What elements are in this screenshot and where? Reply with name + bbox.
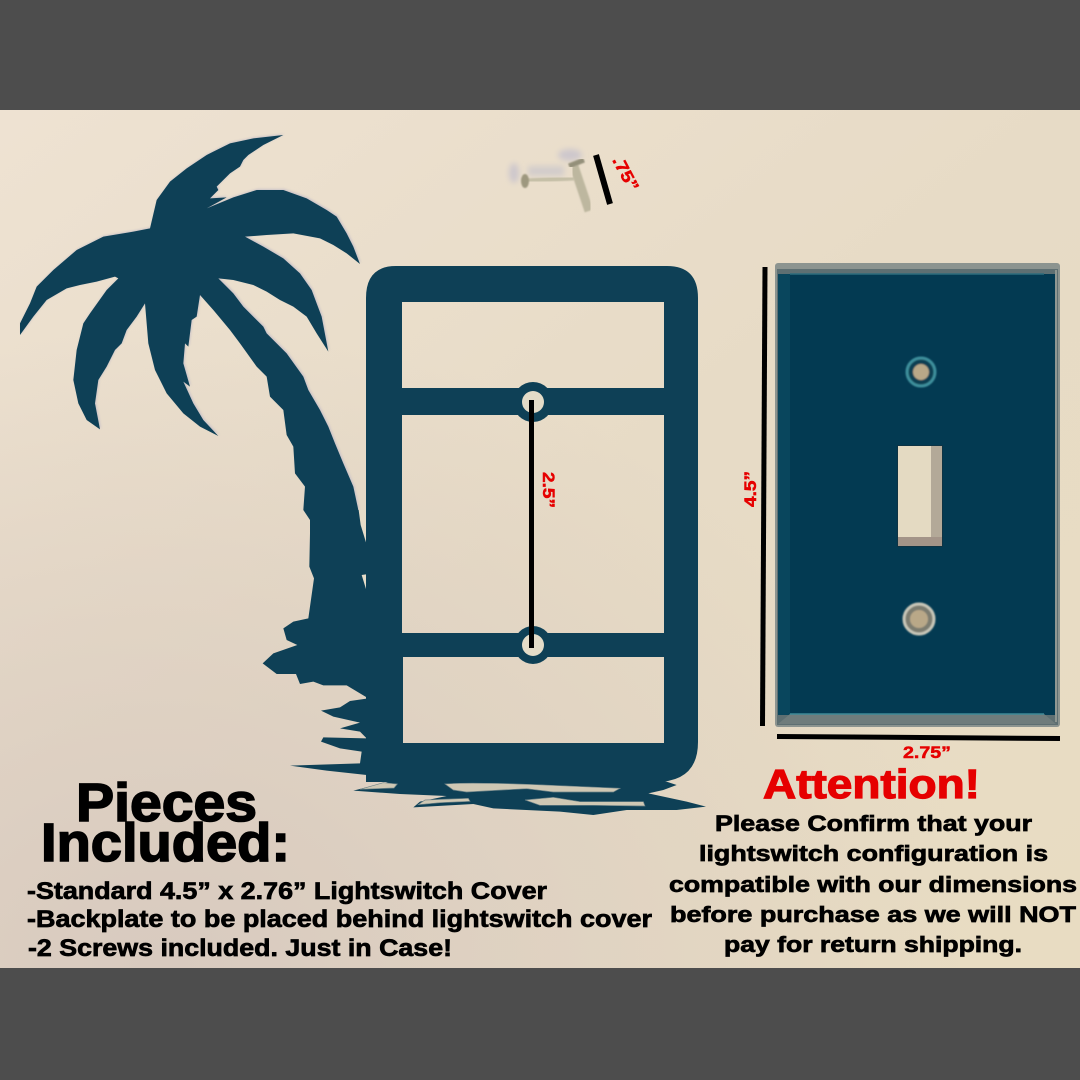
toggle slot xyxy=(897,445,943,547)
lower trunk, shrubs and water silhouette xyxy=(263,510,706,815)
dimension line: screw length xyxy=(596,155,610,204)
lightswitch cover plate xyxy=(775,263,1060,727)
warning text block: before purchase as we will NOT xyxy=(670,902,1077,927)
warning text block: Please Confirm that your xyxy=(715,811,1033,836)
dimension label: 2.5 inch: 2.5” xyxy=(539,472,558,508)
warning text block: lightswitch configuration is xyxy=(699,841,1048,866)
icon: two screws xyxy=(509,149,589,211)
heading: pieces included xyxy=(41,773,290,873)
dimension label: .75 inch: .75” xyxy=(608,153,643,195)
warning text block xyxy=(669,811,1077,957)
list: pieces included xyxy=(27,878,652,962)
photo panel background xyxy=(0,110,1080,968)
cover screw bottom xyxy=(904,604,934,634)
screw hole top xyxy=(513,382,553,422)
dimension label: 4.5 inch: 4.5” xyxy=(741,471,760,507)
dimension line: cover height xyxy=(762,267,765,726)
heading: attention: Attention! xyxy=(763,761,980,807)
backplate with three windows and two screw holes xyxy=(366,266,698,782)
dimension label: 2.75 inch: 2.75” xyxy=(903,743,951,762)
list: pieces included: -Backplate to be placed behind lightswitch cover xyxy=(27,906,652,933)
list: pieces included: -Standard 4.5” x 2.76” Lightswitch Cover xyxy=(27,878,547,905)
warning text block: pay for return shipping. xyxy=(724,932,1022,957)
list: pieces included: -2 Screws included. Just in Case! xyxy=(28,935,452,962)
palm tree crown and trunk silhouette xyxy=(20,135,360,510)
cover screw top xyxy=(907,358,935,386)
screw hole bottom xyxy=(514,626,552,664)
heading: pieces included: Included: xyxy=(41,813,290,873)
water reflections xyxy=(360,783,645,806)
warning text block: compatible with our dimensions xyxy=(669,872,1077,897)
dimension line: cover width xyxy=(777,736,1060,738)
dimension line: screw hole spacing xyxy=(529,400,534,648)
heading: pieces included: Pieces xyxy=(76,773,257,833)
